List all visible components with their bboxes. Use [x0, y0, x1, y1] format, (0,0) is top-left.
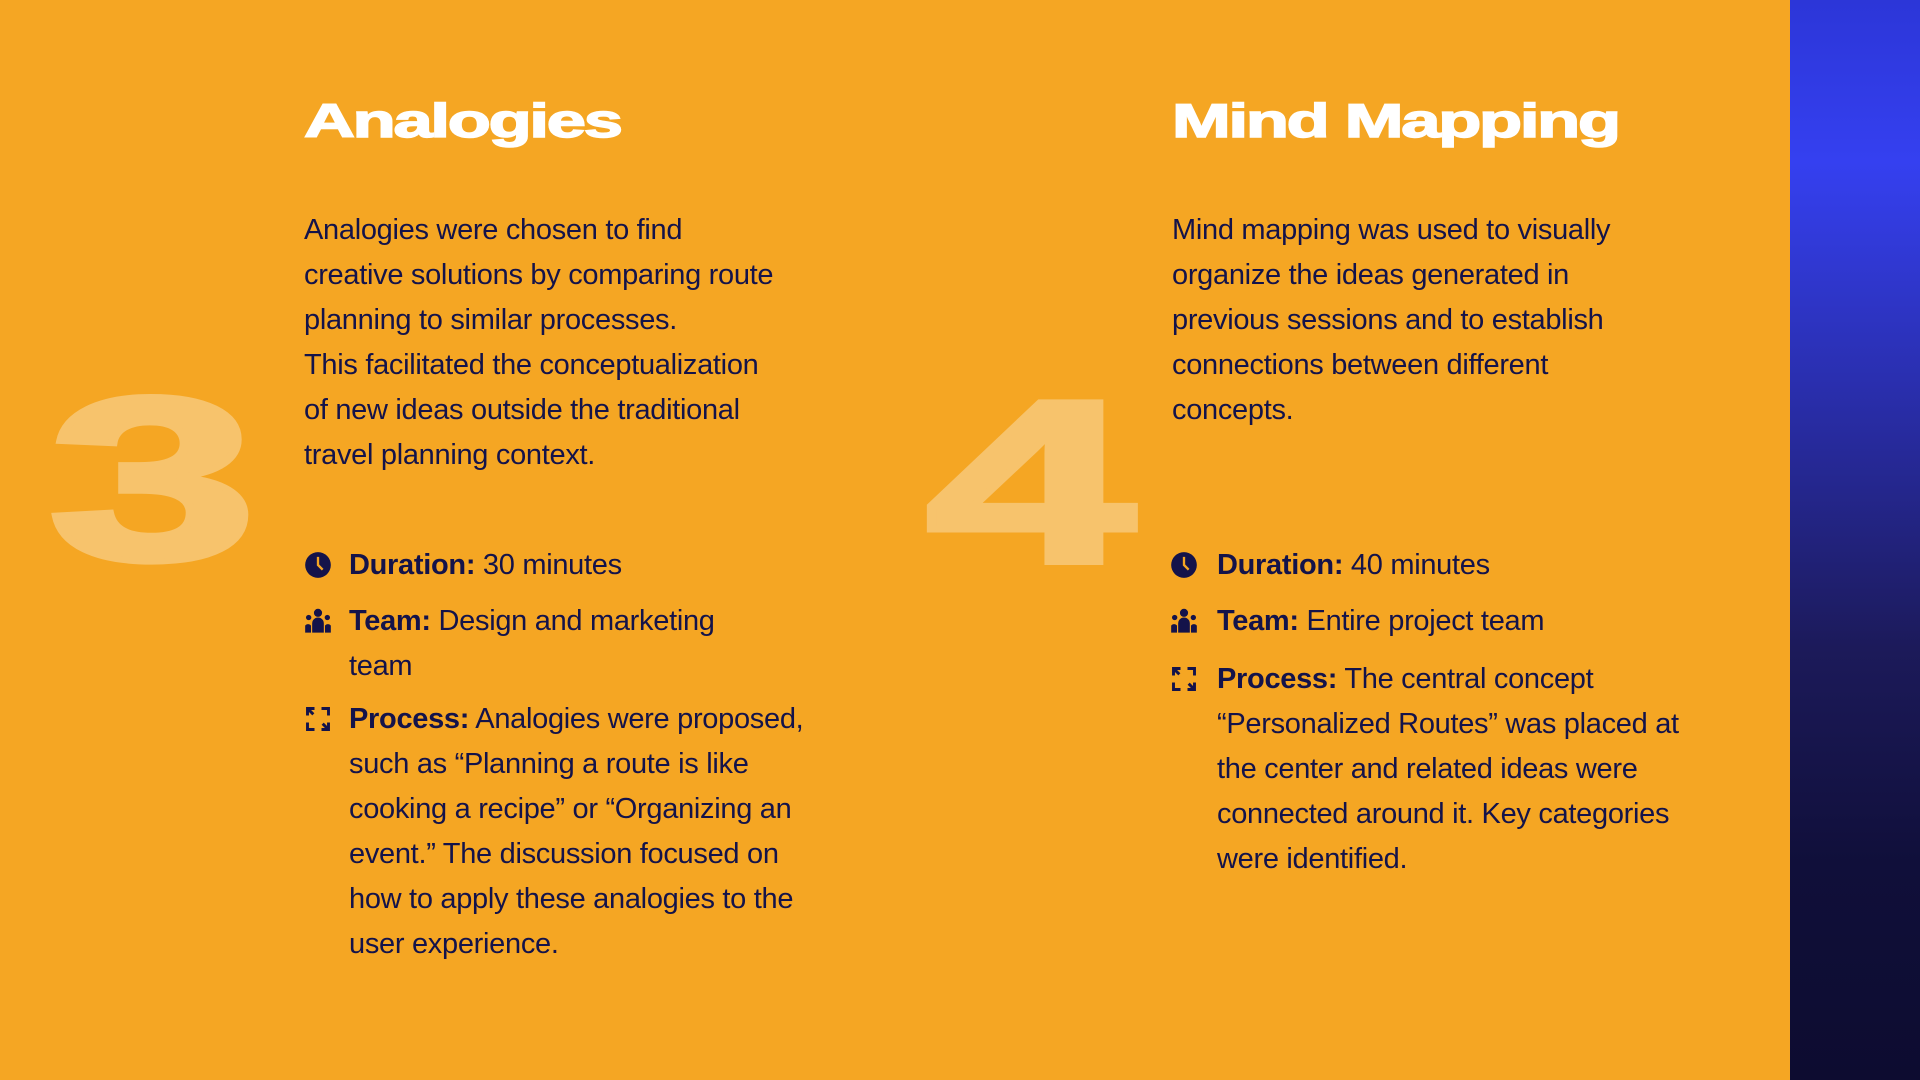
list item: process: user experience.	[349, 928, 559, 960]
icon: process arrows	[1172, 667, 1196, 691]
text block: analogies description: This facilitated the conceptualization	[304, 349, 758, 381]
right image strip	[1790, 0, 1920, 1080]
icon: team	[1171, 608, 1197, 633]
text block: analogies description: planning to similar processes.	[304, 304, 677, 336]
list item: team: Team: Design and marketing	[349, 605, 715, 637]
text block: mind mapping description: Mind mapping was used to visually	[1172, 214, 1610, 246]
text block: analogies description	[304, 214, 773, 471]
icon: clock	[1171, 552, 1197, 578]
text block: mind mapping description: organize the ideas generated in	[1172, 259, 1569, 291]
list item: team: team	[349, 650, 412, 682]
list item: team: Team: Entire project team	[1217, 605, 1544, 637]
list item: process: were identified.	[1217, 843, 1407, 875]
list item: process: such as “Planning a route is like	[349, 748, 749, 780]
list item: process: connected around it. Key categories	[1217, 798, 1669, 830]
list item: process: Process: Analogies were proposed,	[349, 703, 803, 735]
list item: process: cooking a recipe” or “Organizing an	[349, 793, 791, 825]
list item: process: event.” The discussion focused on	[349, 838, 779, 870]
icon: process arrows	[306, 707, 330, 731]
list item: process: “Personalized Routes” was placed at	[1217, 708, 1679, 740]
list item: duration: Duration: 40 minutes	[1217, 549, 1490, 581]
list item: duration: Duration: 30 minutes	[349, 549, 622, 581]
icon: clock	[305, 552, 331, 578]
panel: analogies	[304, 94, 803, 960]
text block: analogies description: Analogies were chosen to find	[304, 214, 682, 246]
list item: team	[349, 605, 715, 682]
heading: Analogies: Analogies	[304, 94, 621, 147]
list item: process: the center and related ideas were	[1217, 753, 1638, 785]
text block: mind mapping description: previous sessions and to establish	[1172, 304, 1604, 336]
list item: process: how to apply these analogies to the	[349, 883, 793, 915]
panel: mind mapping	[1171, 94, 1679, 875]
big number 4: 4	[926, 353, 1135, 612]
icon: team	[305, 608, 331, 633]
text block: analogies description: creative solutions by comparing route	[304, 259, 773, 291]
list item: process	[349, 703, 803, 960]
text block: mind mapping description	[1172, 214, 1610, 426]
list item: process: Process: The central concept	[1217, 663, 1593, 695]
text block: analogies description: travel planning context.	[304, 439, 595, 471]
text block: analogies description: of new ideas outside the traditional	[304, 394, 740, 426]
text block: mind mapping description: connections between different	[1172, 349, 1548, 381]
big number 3: 3	[48, 350, 257, 609]
heading: Mind Mapping: Mind Mapping	[1172, 94, 1619, 147]
list item: process	[1217, 663, 1679, 875]
text block: mind mapping description: concepts.	[1172, 394, 1293, 426]
